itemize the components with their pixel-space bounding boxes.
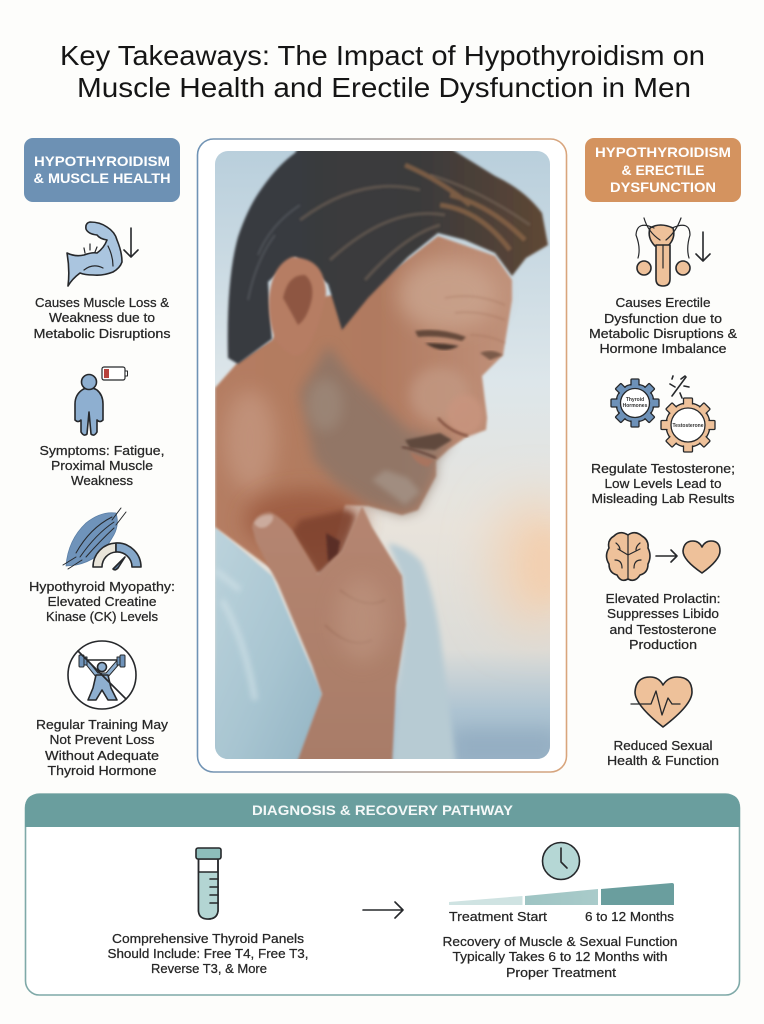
icon: brain arrow heart — [606, 533, 720, 580]
text: thyroid panels: Comprehensive Thyroid Panels — [112, 931, 305, 946]
text: elevated prolactin: Elevated Prolactin: — [606, 591, 720, 606]
panel: diagnosis and recovery pathway — [25, 794, 740, 995]
text: regular training: Not Prevent Loss — [50, 732, 155, 747]
title — [60, 40, 705, 103]
text: regulate testosterone: Regulate Testosterone; — [591, 461, 735, 476]
text: regular training: Without Adequate — [45, 748, 159, 763]
text: symptoms: Proximal Muscle — [51, 458, 153, 473]
text: erectile dysfunction cause: Hormone Imbalance — [600, 341, 726, 356]
icon: muscle and creatine kinase gauge — [63, 508, 141, 570]
text: regulate testosterone: Misleading Lab Results — [592, 491, 735, 506]
beard — [300, 345, 452, 515]
hand — [252, 506, 406, 765]
text: regular training: Regular Training May — [36, 717, 169, 732]
icon: thyroid hormone and testosterone gears: Thyroid — [626, 397, 644, 403]
text: reduced sexual health — [607, 738, 719, 768]
icon: clock — [542, 842, 580, 880]
text: erectile dysfunction cause: Dysfunction due to — [604, 311, 722, 326]
text: regular training — [36, 717, 169, 778]
icon: thyroid hormone and testosterone gears: Testosterone — [672, 423, 704, 429]
text: elevated prolactin: Production — [629, 637, 697, 652]
illustration: man touching his neck — [215, 145, 575, 768]
text: thyroid panels — [108, 931, 308, 976]
chart: treatment timeline wedge: 6 to 12 Months — [585, 909, 675, 924]
title: Muscle Health and Erectile Dysfunction in Men — [77, 72, 691, 103]
panel: central photo frame — [198, 139, 566, 772]
title: Key Takeaways: The Impact of Hypothyroidism on — [60, 40, 705, 71]
icon: thyroid hormone and testosterone gears — [611, 376, 715, 452]
text: myopathy: Hypothyroid Myopathy: — [29, 579, 175, 594]
gap between thumb and fingers — [292, 510, 355, 578]
ear — [267, 256, 328, 338]
text: muscle loss: Causes Muscle Loss & — [35, 295, 169, 310]
text: recovery duration: Proper Treatment — [506, 965, 616, 980]
text: muscle loss: Metabolic Disruptions — [34, 326, 171, 341]
icon: test tube — [196, 848, 221, 919]
text: myopathy: Elevated Creatine — [48, 594, 156, 609]
icon: thyroid hormone and testosterone gears: Hormones — [623, 403, 648, 409]
text: symptoms: Weakness — [71, 473, 133, 488]
mouth — [402, 447, 436, 458]
chart: treatment timeline wedge — [449, 883, 675, 924]
text: symptoms: Symptoms: Fatigue, — [40, 443, 164, 458]
text: erectile dysfunction cause: Causes Erectile — [616, 295, 710, 310]
heading: erectile dysfunction: DYSFUNCTION — [610, 179, 716, 195]
icon: male reproductive system with down arrow — [636, 218, 710, 286]
text: regular training: Thyroid Hormone — [48, 763, 156, 778]
forehead creases — [445, 296, 505, 343]
heading: erectile dysfunction — [585, 138, 741, 202]
nose shadow — [438, 418, 468, 436]
heading: diagnosis and recovery pathway: DIAGNOSIS & RECOVERY PATHWAY — [252, 802, 514, 818]
eye and eyebrow — [415, 330, 466, 341]
text: elevated prolactin: and Testosterone — [610, 622, 716, 637]
icon: fatigued person with low battery — [75, 367, 128, 435]
text: reduced sexual health: Health & Function — [607, 753, 719, 768]
text: recovery duration: Recovery of Muscle & Sexual Function — [442, 934, 678, 949]
text: recovery duration: Typically Takes 6 to 12 Months with — [452, 949, 668, 964]
hair — [228, 145, 548, 364]
heading: muscle health: & MUSCLE HEALTH — [34, 170, 170, 186]
panel: hypothyroidism and muscle health column — [24, 138, 180, 778]
arrow: to recovery timeline — [363, 902, 403, 918]
panel: hypothyroidism and erectile dysfunction column — [585, 138, 741, 768]
text: symptoms — [40, 443, 164, 488]
heading: muscle health — [24, 138, 180, 202]
heading: diagnosis and recovery pathway — [25, 794, 740, 827]
text: elevated prolactin: Suppresses Libido — [607, 606, 719, 621]
text: thyroid panels: Reverse T3, & More — [151, 961, 267, 976]
heading: erectile dysfunction: & ERECTILE — [622, 162, 704, 178]
text: elevated prolactin — [606, 591, 720, 652]
text: regulate testosterone: Low Levels Lead to — [604, 476, 722, 491]
text: myopathy: Kinase (CK) Levels — [46, 609, 158, 624]
icon: barbell lifter crossed out — [68, 641, 136, 709]
text: recovery duration — [442, 934, 678, 980]
chart: treatment timeline wedge: Treatment Start — [449, 909, 547, 924]
heading: muscle health: HYPOTHYROIDISM — [34, 153, 170, 169]
icon: heart with pulse line — [631, 677, 692, 727]
text: muscle loss — [34, 295, 171, 341]
neck and face — [215, 236, 512, 590]
text: erectile dysfunction cause: Metabolic Disruptions & — [589, 326, 737, 341]
text: muscle loss: Weakness due to — [49, 310, 155, 325]
text: reduced sexual health: Reduced Sexual — [614, 738, 713, 753]
text: regulate testosterone — [591, 461, 735, 506]
heading: erectile dysfunction: HYPOTHYROIDISM — [595, 144, 731, 160]
text: erectile dysfunction cause — [589, 295, 737, 356]
shirt — [215, 527, 322, 765]
icon: flexed arm with down arrow — [67, 222, 138, 286]
text: myopathy — [29, 579, 175, 624]
text: thyroid panels: Should Include: Free T4, Free T3, — [108, 946, 308, 961]
